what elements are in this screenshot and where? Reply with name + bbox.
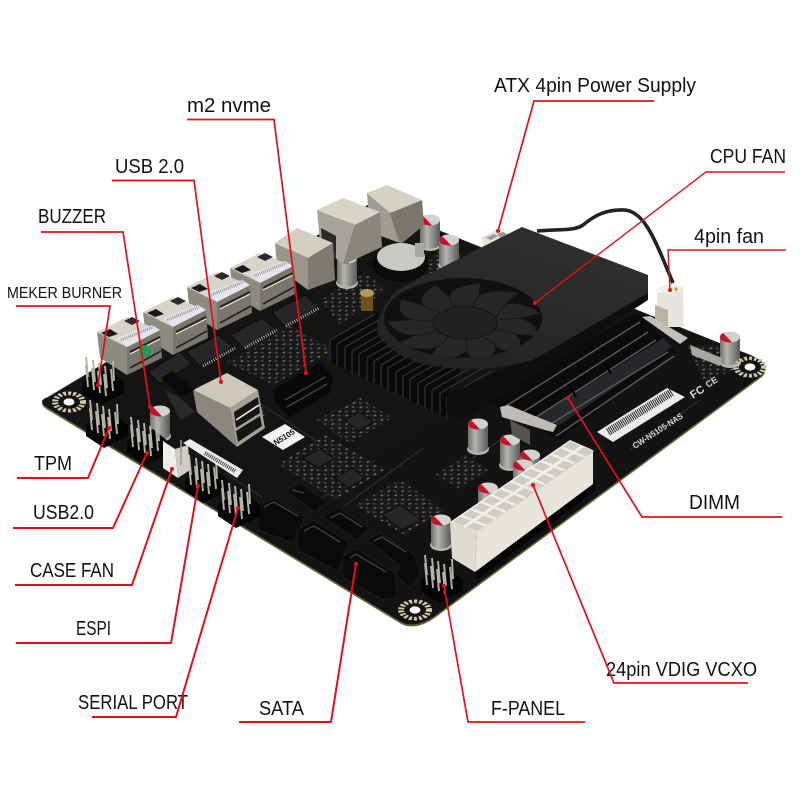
stickers on board: N5105: [272, 427, 297, 447]
label: BUZZER: [38, 206, 152, 409]
label: ESPI: [16, 484, 200, 643]
label: SERIAL PORT: [78, 506, 240, 717]
label: 24pin VDIG VCXO: [531, 483, 757, 683]
label: USB 2.0: USB 2.0: [115, 156, 184, 178]
heatsink fins: [330, 313, 492, 419]
fan: [384, 278, 542, 358]
label: USB2.0: [13, 451, 149, 528]
IC chips: [148, 295, 422, 530]
DIMM slot: [487, 312, 722, 445]
fan shroud: [377, 227, 648, 369]
coin battery: [372, 243, 428, 282]
label: ESPI: ESPI: [76, 618, 111, 640]
label: 24pin VDIG VCXO: 24pin VDIG VCXO: [606, 659, 757, 681]
label: MEKER BURNER: MEKER BURNER: [7, 285, 122, 302]
fan hub: [433, 307, 497, 339]
m.2 slots: [161, 362, 333, 420]
ATX 4pin connector: [482, 230, 510, 252]
label: CPU FAN: [533, 146, 786, 305]
label: BUZZER: BUZZER: [38, 206, 106, 228]
front USB stack: [193, 373, 265, 447]
stickers on board: CE: [704, 374, 720, 390]
label: ATX 4pin Power Supply: [494, 75, 696, 233]
stickers on board: FC: [688, 383, 707, 402]
label: CASE FAN: [15, 467, 174, 585]
brass standoff: [360, 289, 374, 311]
infographic: motherboard with labelled connectors: [8, 77, 786, 723]
RJ45 ethernet ports: [97, 253, 295, 375]
label: m2 nvme: m2 nvme: [187, 95, 271, 117]
label: MEKER BURNER: [7, 285, 122, 387]
label: CPU FAN: CPU FAN: [710, 146, 786, 168]
chip pins: [203, 308, 319, 366]
stickers on board: [183, 374, 720, 478]
label: 4pin fan: [668, 226, 786, 292]
rear USB ports: [275, 185, 424, 290]
heatsink lower plate: [447, 290, 648, 420]
label: DIMM: DIMM: [689, 492, 740, 514]
label: F-PANEL: F-PANEL: [491, 698, 565, 720]
silver latches: [500, 405, 557, 432]
label: TPM: [17, 426, 111, 478]
4pin fan connector with cable: [537, 210, 684, 327]
capacitors behind the heatsink and connectors: [149, 214, 741, 551]
case fan connector: [163, 440, 190, 478]
label: m2 nvme: [187, 95, 308, 375]
pin headers: [82, 357, 463, 603]
label: USB2.0: USB2.0: [33, 502, 94, 524]
motherboard PCB: [42, 203, 765, 626]
label: F-PANEL: [442, 584, 585, 722]
stickers on board: CW-N5105-NAS: [631, 411, 685, 451]
label: USB 2.0: [112, 156, 223, 384]
label: TPM: TPM: [34, 453, 72, 475]
label: SERIAL PORT: SERIAL PORT: [78, 692, 188, 714]
label: SATA: [239, 562, 358, 722]
circuit traces: [225, 345, 745, 515]
label: ATX 4pin Power Supply: ATX 4pin Power Supply: [494, 75, 696, 97]
label: SATA: SATA: [259, 698, 305, 720]
label: CASE FAN: CASE FAN: [30, 560, 114, 582]
mounting holes: [55, 358, 764, 619]
label: DIMM: [566, 396, 782, 517]
component patches: [148, 250, 745, 535]
24pin power connector: [450, 440, 596, 579]
green varistor: [139, 345, 151, 357]
label: 4pin fan: 4pin fan: [694, 226, 764, 248]
SATA connectors: [257, 483, 420, 600]
